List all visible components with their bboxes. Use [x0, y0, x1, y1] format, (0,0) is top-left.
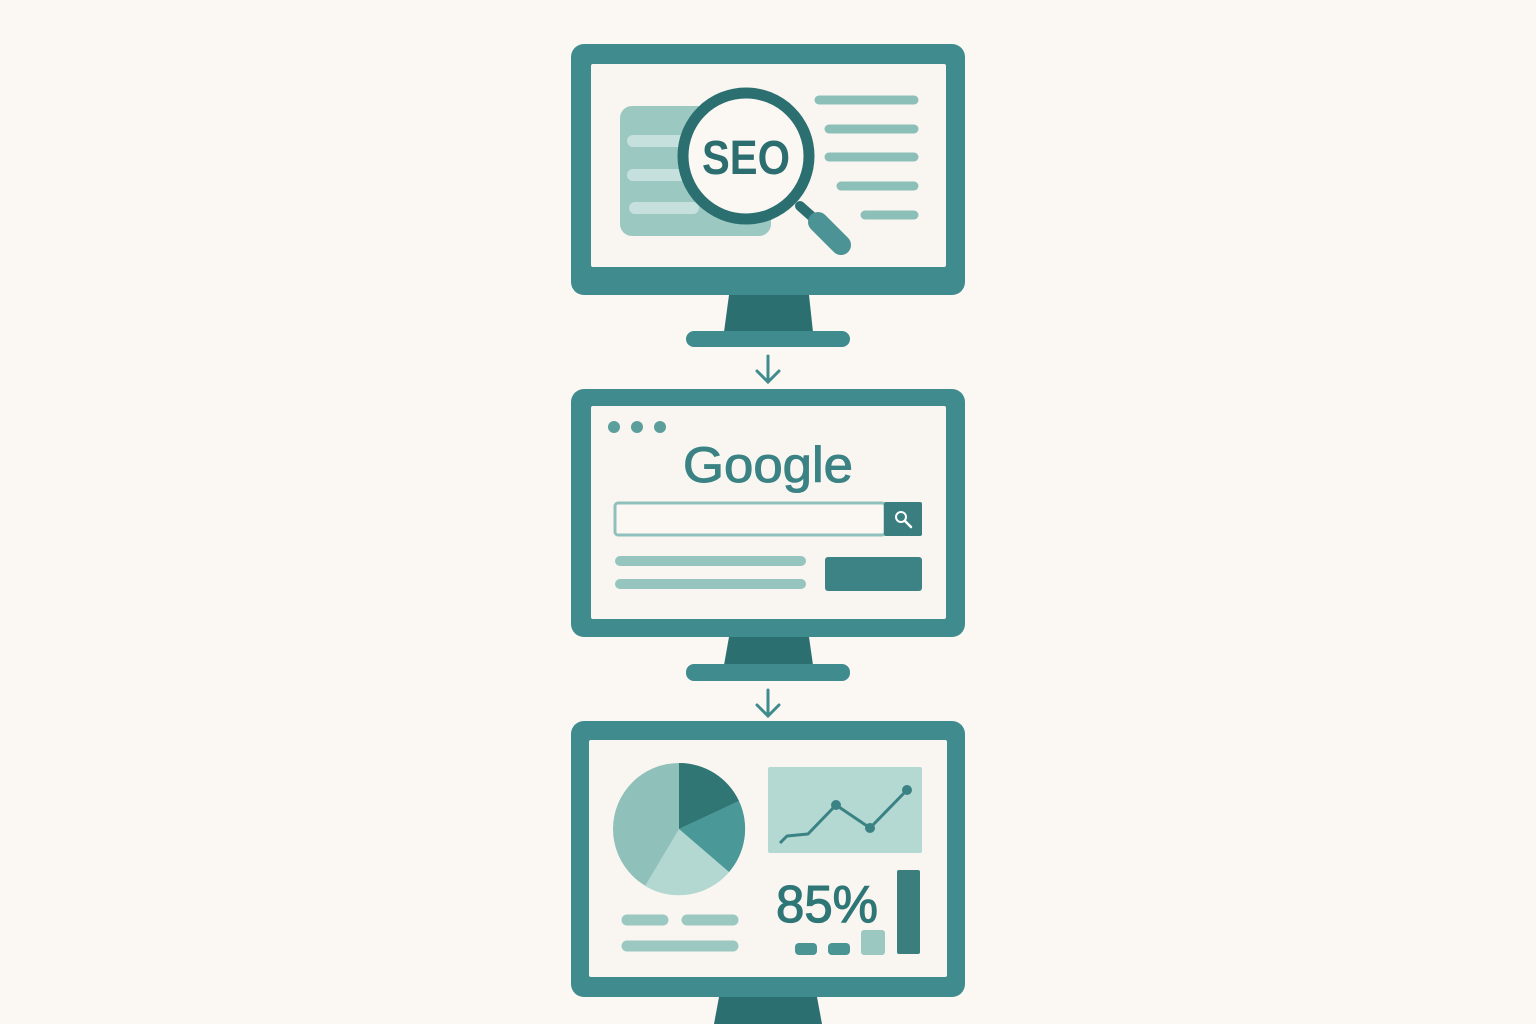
legend lines	[627, 920, 733, 946]
icon: magnifying glass with SEO: SEO	[702, 132, 790, 185]
monitor 3 stand	[714, 997, 822, 1024]
browser dots	[608, 421, 666, 433]
button	[825, 557, 922, 591]
monitor 3 screen	[589, 740, 947, 977]
monitor 1 stand	[686, 295, 850, 347]
monitor 2 screen	[591, 406, 946, 619]
monitor 2: Google search	[571, 389, 965, 681]
result lines	[620, 561, 801, 584]
monitor 1 frame	[571, 44, 965, 295]
arrow 2	[757, 690, 779, 716]
monitor 3: analytics	[571, 721, 965, 1024]
icon: magnifying glass with SEO	[683, 93, 841, 245]
arrow 1	[757, 356, 779, 382]
pie chart	[613, 763, 745, 895]
monitor 1 screen	[591, 64, 946, 267]
search bar	[615, 502, 922, 536]
monitor 1: SEO	[571, 44, 965, 347]
stat 85%: 85%	[776, 876, 878, 934]
monitor 3 frame	[571, 721, 965, 997]
bars	[795, 870, 920, 955]
text lines right	[819, 100, 914, 215]
line chart	[768, 767, 922, 853]
monitor 2 stand	[686, 637, 850, 681]
monitor 2 frame	[571, 389, 965, 637]
Google logo text: Google	[683, 437, 853, 493]
document card	[620, 106, 771, 236]
